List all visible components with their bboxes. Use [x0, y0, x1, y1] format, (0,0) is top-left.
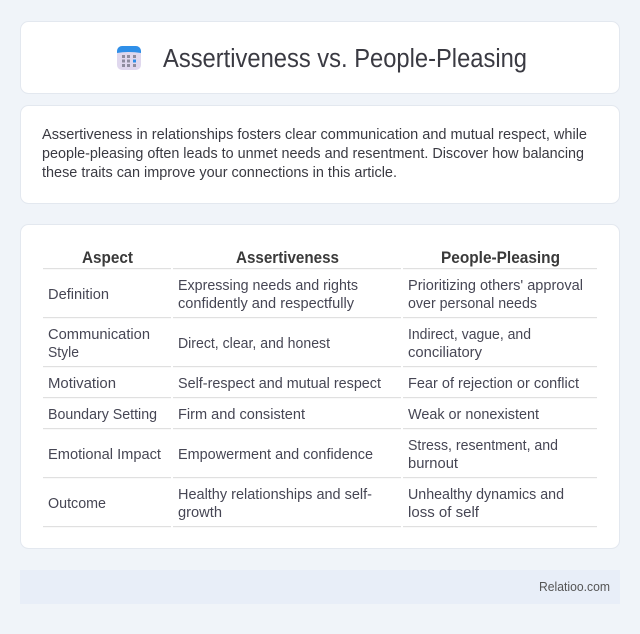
- row: motivation: Motivation: [48, 375, 116, 392]
- row: motivation: Self-respect and mutual respect: [178, 375, 382, 392]
- row: emotional impact: burnout: [408, 455, 459, 472]
- row: emotional impact: Emotional Impact: [48, 446, 162, 463]
- row: emotional impact: Empowerment and confidence: [178, 446, 373, 463]
- row: communication style: Style: [48, 344, 79, 361]
- footer: [20, 570, 620, 604]
- icon: calendar: [117, 46, 141, 70]
- row: boundary setting: Weak or nonexistent: [408, 406, 540, 423]
- text block: intro: people-pleasing often leads to unmet needs and resentment. Discover how balancing: [42, 145, 584, 162]
- row: definition: confidently and respectfully: [178, 295, 354, 312]
- table header: People-Pleasing: [441, 249, 560, 267]
- row: outcome: loss of self: [408, 504, 480, 521]
- row: outcome: Healthy relationships and self-: [178, 486, 372, 503]
- row: outcome: Outcome: [48, 495, 106, 512]
- row: definition: over personal needs: [408, 295, 537, 312]
- row: communication style: Indirect, vague, and: [408, 326, 531, 343]
- row: definition: Prioritizing others' approval: [408, 277, 583, 294]
- footer credit: Relatioo.com: [539, 580, 610, 594]
- row: emotional impact: [48, 437, 558, 472]
- row: definition: Definition: [48, 286, 109, 303]
- row: outcome: [48, 486, 564, 521]
- row: boundary setting: Boundary Setting: [48, 406, 157, 423]
- panel: intro text card: [20, 106, 620, 204]
- text block: intro: [42, 126, 587, 181]
- table header: [82, 249, 560, 267]
- row: communication style: Communication: [48, 326, 150, 343]
- table header: Assertiveness: [236, 249, 339, 267]
- row: communication style: [48, 326, 531, 361]
- table header: Aspect: [82, 249, 133, 267]
- row: motivation: [48, 375, 580, 392]
- row: outcome: Unhealthy dynamics and: [408, 486, 564, 503]
- text block: intro: Assertiveness in relationships fosters clear communication and mutual respect, while: [42, 126, 587, 143]
- row: definition: Expressing needs and rights: [178, 277, 358, 294]
- text block: intro: these traits can improve your connections in this article.: [42, 164, 397, 181]
- row: definition: [48, 277, 583, 312]
- title: Assertiveness vs. People-Pleasing: [163, 45, 527, 73]
- row: motivation: Fear of rejection or conflict: [408, 375, 580, 392]
- row: outcome: growth: [178, 504, 222, 521]
- row: emotional impact: Stress, resentment, and: [408, 437, 558, 454]
- row: communication style: Direct, clear, and honest: [178, 335, 331, 352]
- row: boundary setting: [48, 406, 540, 423]
- panel: comparison table card: [20, 224, 620, 548]
- panel: title card: [20, 22, 620, 94]
- row: communication style: conciliatory: [408, 344, 482, 361]
- table rules: [43, 268, 597, 527]
- row: boundary setting: Firm and consistent: [178, 406, 306, 423]
